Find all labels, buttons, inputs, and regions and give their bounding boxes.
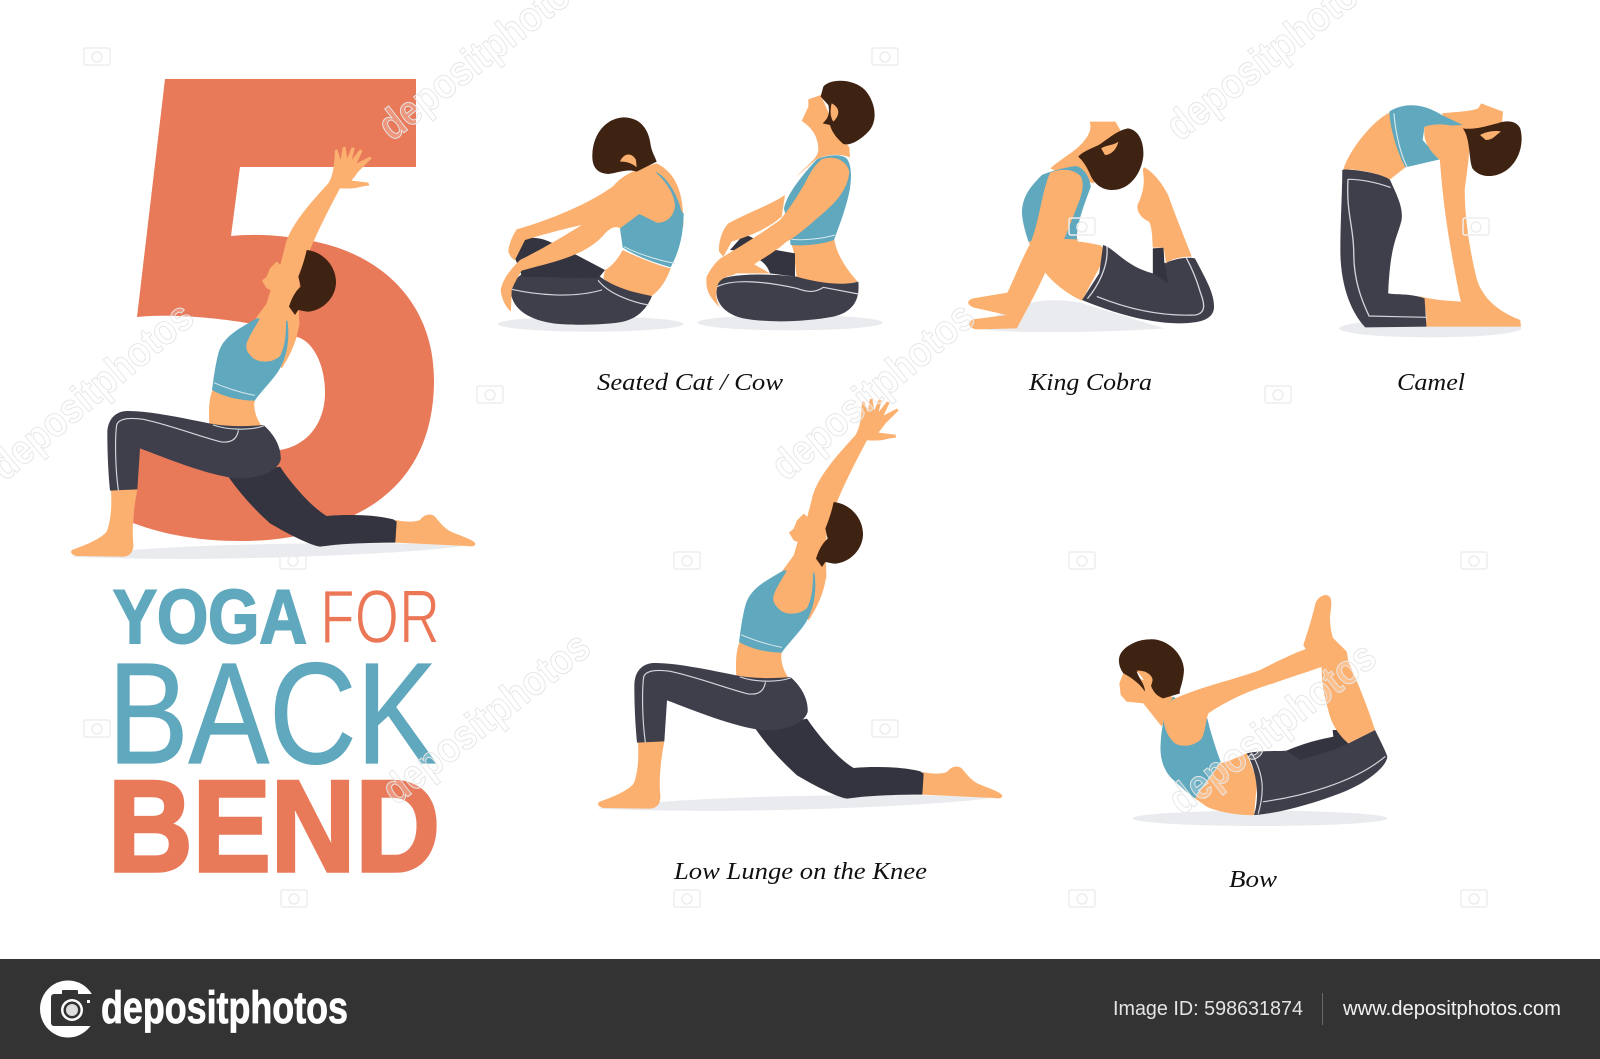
caption: Bow: Bow (1229, 866, 1278, 893)
image id: Image ID: 598631874 (1113, 998, 1303, 1020)
divider (1322, 993, 1323, 1025)
figure: king cobra pose (968, 122, 1214, 332)
figure: low lunge on the knee (597, 399, 1002, 811)
figure: camel pose (1339, 103, 1522, 337)
watermark overlay: depositphotos (1159, 632, 1385, 823)
figure: seated cat pose (498, 117, 684, 332)
caption: Seated Cat / Cow: Seated Cat / Cow (597, 369, 784, 396)
watermark overlay (0, 0, 1489, 907)
title: YOGA FOR BACK BEND (108, 575, 440, 899)
figure: low lunge on the number 5 (70, 147, 475, 559)
caption: Low Lunge on the Knee: Low Lunge on the Knee (673, 858, 927, 885)
watermark overlay: depositphotos (762, 292, 983, 489)
big number 5 (133, 79, 434, 541)
watermark overlay: depositphotos (373, 622, 599, 813)
figure: bow pose (1119, 595, 1387, 826)
website url: www.depositphotos.com (1342, 998, 1561, 1020)
heading word: BEND: BEND (108, 753, 440, 899)
caption: King Cobra: King Cobra (1028, 369, 1152, 396)
footer bar (0, 959, 1600, 1059)
icon: camera logo (40, 980, 96, 1038)
heading word: FOR: FOR (320, 575, 440, 660)
figure: seated cow pose (697, 81, 883, 330)
heading word: YOGA: YOGA (113, 575, 307, 660)
brand name: depositphotos (101, 982, 348, 1033)
heading word: BACK: BACK (108, 633, 437, 794)
caption: Camel: Camel (1397, 369, 1465, 396)
